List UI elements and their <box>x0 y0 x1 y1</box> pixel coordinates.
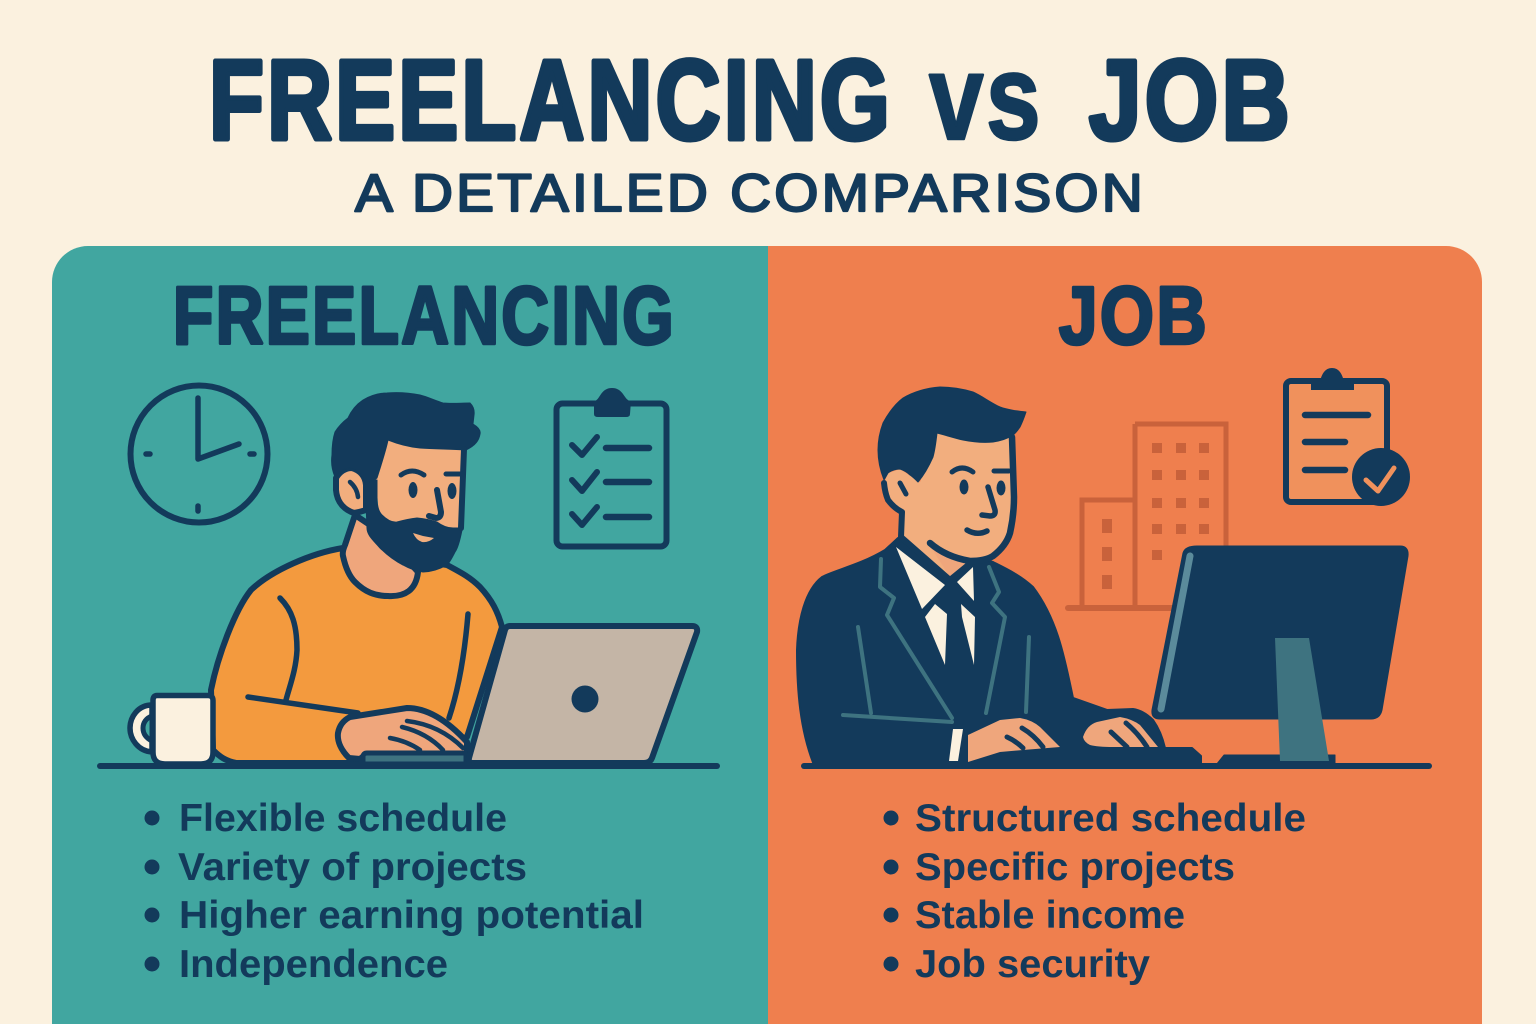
monitor base <box>1216 755 1335 765</box>
icon: document clipboard with check badge <box>1286 368 1410 506</box>
title: FREELANCING <box>209 37 893 163</box>
monitor stand <box>1275 638 1329 761</box>
title: JOB <box>1089 37 1293 163</box>
left hand <box>968 718 1060 762</box>
icon: office buildings <box>1068 424 1226 608</box>
suit seams <box>843 559 1029 722</box>
screen highlight <box>1161 556 1190 709</box>
job benefits list: Structured schedule <box>915 797 1306 840</box>
illustration: office worker <box>797 387 1408 765</box>
freelancing benefits list: Flexible schedule <box>179 797 507 840</box>
sweater <box>211 548 502 763</box>
eyebrows <box>952 468 1009 472</box>
icon: clock <box>130 386 268 522</box>
suit <box>797 538 1201 765</box>
icon: checklist clipboard <box>556 388 666 546</box>
neck <box>343 515 418 596</box>
illustration: freelancer <box>211 393 697 764</box>
keyboard <box>363 753 466 764</box>
shirt collar <box>896 547 975 665</box>
nose <box>982 487 995 516</box>
laptop <box>469 626 697 763</box>
cuff <box>949 729 963 761</box>
eyebrows <box>401 471 462 475</box>
subtitle: A DETAILED COMPARISON <box>355 164 1146 223</box>
freelancing benefits list <box>144 797 644 986</box>
desk line <box>804 763 1429 769</box>
neck and face <box>884 433 1014 580</box>
ear <box>336 468 366 513</box>
face <box>376 440 462 530</box>
head outline <box>884 483 972 580</box>
job benefits list: Specific projects <box>915 846 1235 889</box>
title: vs <box>929 29 1043 165</box>
monitor screen <box>1152 546 1408 719</box>
neck shadow <box>930 546 966 577</box>
panel: freelancing <box>52 246 768 1024</box>
hair <box>332 393 480 484</box>
sweater seams <box>248 598 468 718</box>
icon: coffee mug <box>130 696 213 764</box>
jaw outline <box>930 437 1014 561</box>
hand <box>338 708 467 759</box>
freelancing benefits list: Independence <box>179 943 448 986</box>
panel: job <box>768 246 1482 1024</box>
freelancing benefits list: Higher earning potential <box>179 894 644 937</box>
job benefits list <box>884 797 1306 986</box>
desk line <box>100 763 717 769</box>
mouth <box>967 530 987 533</box>
ear detail <box>900 483 906 494</box>
hair <box>878 387 1026 482</box>
face edge <box>461 449 464 528</box>
eyes <box>408 482 418 498</box>
job heading: JOB <box>1059 270 1209 362</box>
eyes <box>960 480 968 494</box>
freelancing heading: FREELANCING <box>173 270 676 362</box>
freelancing benefits list: Variety of projects <box>178 846 527 889</box>
beard <box>365 480 462 572</box>
right hand <box>1083 717 1158 747</box>
nose <box>429 490 441 518</box>
mouth <box>413 533 434 542</box>
job benefits list: Stable income <box>915 894 1185 937</box>
job benefits list: Job security <box>915 943 1150 986</box>
